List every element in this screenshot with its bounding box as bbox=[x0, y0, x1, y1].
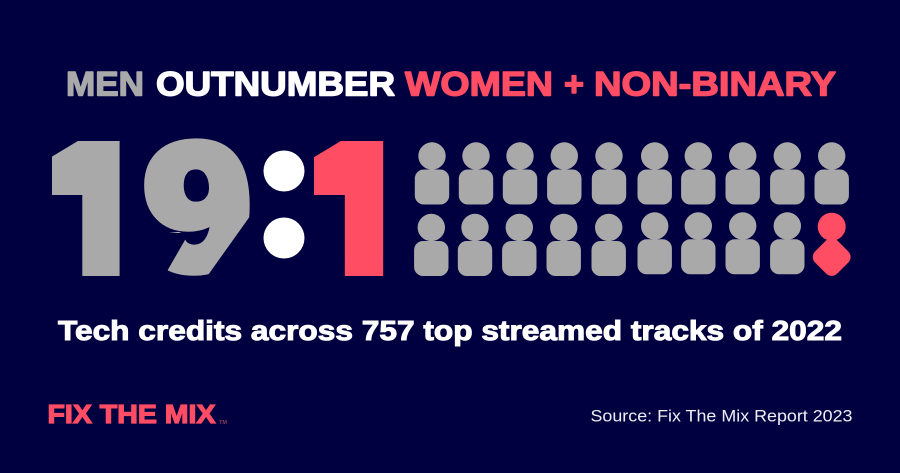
title: MEN bbox=[66, 66, 144, 104]
ratio 19:1: 1 bbox=[302, 102, 416, 314]
source: Source: Fix The Mix Report 2023 bbox=[590, 408, 852, 426]
title: + bbox=[564, 66, 584, 104]
logo: TM bbox=[219, 420, 227, 426]
ratio 19:1: : bbox=[256, 93, 315, 289]
ratio 19:1 bbox=[30, 93, 428, 314]
ratio 19:1: 1 bbox=[39, 102, 153, 314]
logo: FIX THE MIX bbox=[48, 401, 216, 429]
icon array: 20 people bbox=[414, 142, 849, 276]
title: WOMEN bbox=[405, 66, 553, 104]
title bbox=[66, 66, 836, 104]
title: NON-BINARY bbox=[594, 66, 836, 104]
subtitle: Tech credits across 757 top streamed tracks of 2022 bbox=[58, 315, 842, 346]
icon: red person bbox=[809, 213, 854, 279]
title: OUTNUMBER bbox=[156, 66, 395, 104]
ratio 19:1: 9 bbox=[144, 109, 250, 306]
